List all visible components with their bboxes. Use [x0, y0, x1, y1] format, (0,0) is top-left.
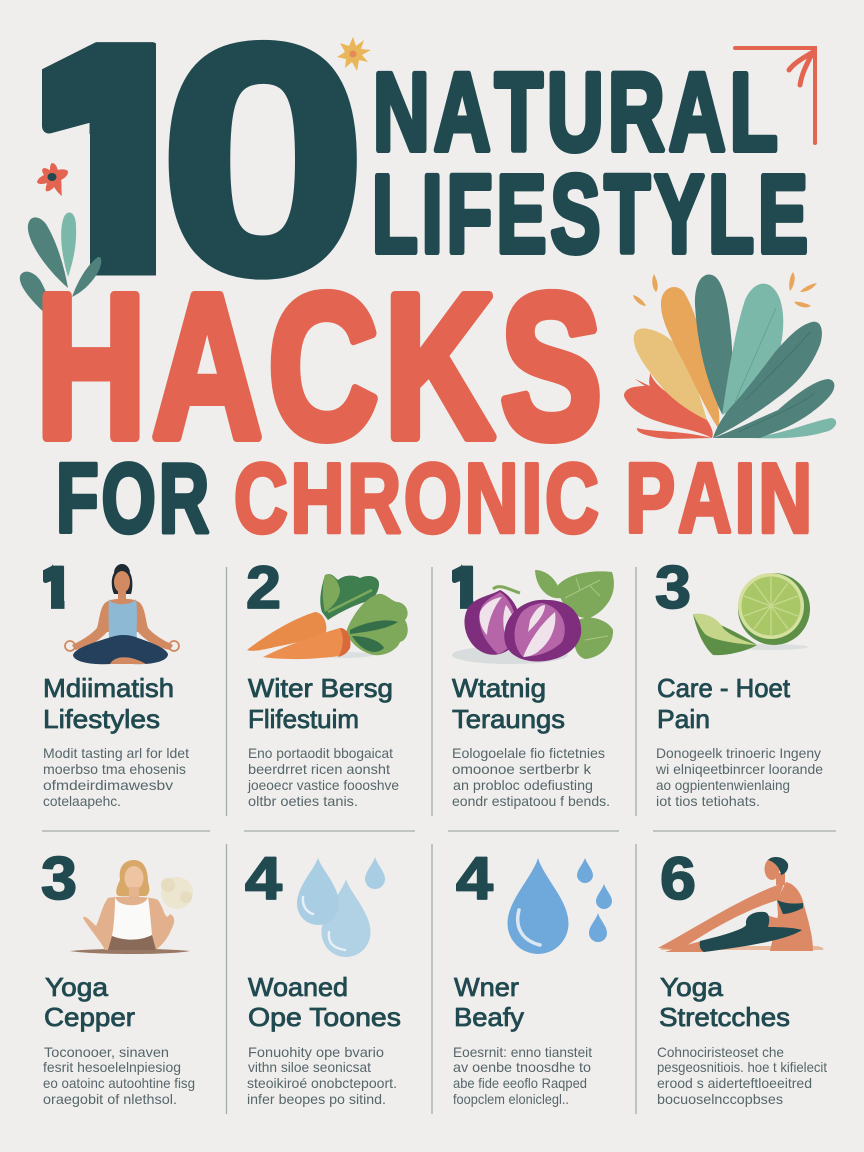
- icon: left plant leaves: [20, 212, 101, 318]
- heading: Care - Hoet: [657, 673, 791, 703]
- number 4: 4: [245, 845, 283, 912]
- panel: card 3: [443, 554, 614, 809]
- icon: flower: [37, 163, 68, 196]
- body text: fesrit hesoelelnpiesiog: [43, 1059, 181, 1075]
- heading: Pain: [657, 704, 710, 734]
- icon: woman with flowers: [70, 860, 193, 954]
- icon: seated stretch: [658, 857, 823, 952]
- body text: av oenbe tnoosdhe to: [453, 1059, 591, 1075]
- number 3: 3: [41, 845, 77, 912]
- panel: card 6: [245, 845, 401, 1107]
- body text: Modit tasting arl for ldet: [43, 745, 189, 761]
- body text: joeoecr vastice foooshve: [247, 777, 399, 793]
- number 2: 2: [246, 554, 281, 621]
- icon: carrots: [247, 574, 408, 659]
- heading: Mdiimatish: [43, 673, 174, 703]
- title: hacks: HACKS: [36, 252, 608, 481]
- body text: eo oatoinc autoohtine fisg: [43, 1075, 195, 1091]
- body text: cotelaapehc.: [43, 793, 121, 809]
- panel: card 2: [246, 554, 408, 809]
- body text: Donogeelk trinoeric Ingeny: [656, 745, 821, 761]
- heading: Cepper: [44, 1002, 135, 1032]
- body text: infer beopes po sitind.: [247, 1091, 386, 1107]
- body text: beerdrret ricen aonsht: [248, 761, 390, 777]
- body text: Toconooer, sinaven: [44, 1044, 169, 1060]
- number 1: 1: [34, 554, 77, 621]
- body text: erood s aiderteftloeeitred: [657, 1075, 812, 1091]
- body text: moerbso tma ehosenis: [43, 761, 186, 777]
- body text: oraegobit of nlethsol.: [43, 1091, 177, 1107]
- body text: Cohnociristeoset che: [657, 1044, 784, 1060]
- body text: wi elniqeetbinrcer loorande: [655, 761, 823, 777]
- heading: Witer Bersg: [248, 673, 393, 703]
- icon: meditating woman: [65, 564, 179, 664]
- icon: leaf bundle: [624, 272, 836, 439]
- icon: pale water drops: [297, 857, 385, 957]
- body text: Eno portaodit bbogaicat: [248, 745, 393, 761]
- title: for chronic pain: FOR: [56, 443, 212, 553]
- body text: omoonoe sertberbr k: [452, 761, 592, 777]
- heading: Stretcches: [659, 1002, 790, 1032]
- panel: card 7: [453, 845, 612, 1107]
- body text: bocuoselnccopbses: [657, 1091, 783, 1107]
- panel: card 4: [655, 554, 823, 809]
- body text: eondr estipatoou f bends.: [452, 793, 610, 809]
- body text: iot tios tetiohats.: [656, 793, 760, 809]
- icon: lime: [693, 573, 810, 655]
- body text: oltbr oeties tanis.: [248, 793, 358, 809]
- icon: blue water drops: [508, 858, 612, 954]
- body text: foopclem eloniclegl..: [453, 1091, 569, 1107]
- icon: corner arrow: [735, 48, 815, 143]
- number 4: 4: [456, 845, 494, 912]
- body text: an probloc odefiusting: [453, 777, 593, 793]
- icon: sun: [337, 37, 371, 71]
- body text: vithn siloe seonicsat: [248, 1059, 371, 1075]
- body text: ofmdeirdimawesbv: [43, 777, 173, 793]
- panel: card 8: [657, 845, 827, 1107]
- body text: Eoesrnit: enno tiansteit: [453, 1044, 592, 1060]
- panel: card 1: [34, 554, 189, 809]
- heading: Yoga: [45, 972, 109, 1002]
- heading: Beafy: [454, 1002, 524, 1032]
- title: natural lifestyle: [372, 51, 812, 276]
- heading: Yoga: [660, 972, 724, 1002]
- icon: red onions and leaves: [452, 570, 614, 664]
- body text: ao ogpientenwienlaing: [656, 777, 790, 793]
- heading: Ope Toones: [248, 1002, 401, 1032]
- number 6: 6: [660, 845, 696, 912]
- heading: Wner: [454, 972, 519, 1002]
- body text: abe fide eeoflo Raqped: [453, 1075, 587, 1091]
- heading: Teraungs: [452, 704, 565, 734]
- heading: Wtatnig: [452, 673, 546, 703]
- body text: Eologoelale fio fictetnies: [452, 745, 605, 761]
- body text: steoikiroé onobctepoort.: [247, 1075, 397, 1091]
- body text: Fonuohity ope bvario: [248, 1044, 384, 1060]
- heading: Lifestyles: [43, 704, 160, 734]
- heading: Flifestuim: [248, 704, 359, 734]
- number 1: [452, 564, 474, 609]
- heading: Woaned: [248, 972, 348, 1002]
- body text: pesgeosnitiois. hoe t kifielecit: [657, 1059, 827, 1075]
- number 1: 1: [443, 554, 486, 621]
- panel: card 5: [41, 845, 195, 1107]
- title number: 10: [42, 40, 357, 280]
- number 3: 3: [655, 554, 691, 621]
- number 1: [43, 564, 64, 609]
